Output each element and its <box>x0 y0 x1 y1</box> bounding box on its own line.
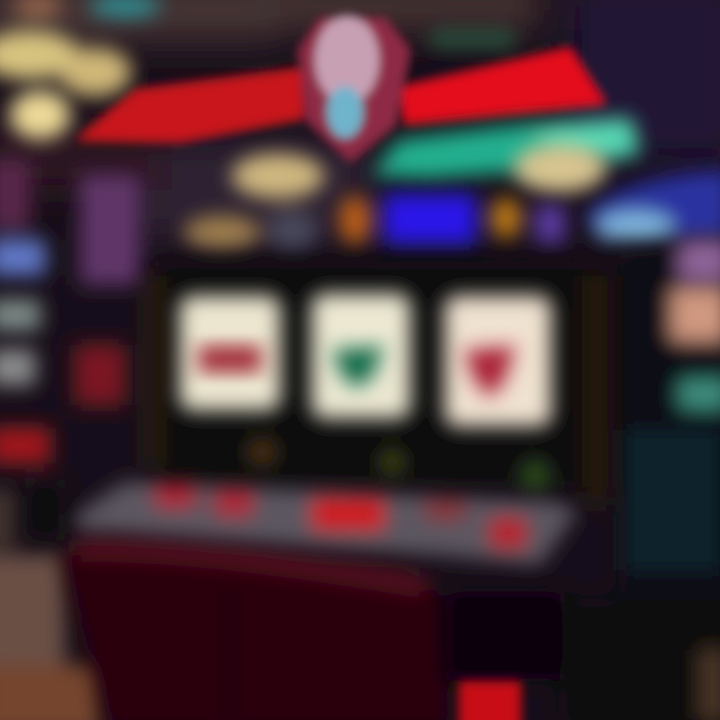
reel 3 symbol <box>464 346 516 398</box>
right blue dome <box>585 170 720 240</box>
slot machine cabinet <box>145 262 615 505</box>
left machines <box>0 160 140 540</box>
reel 2 symbol <box>332 346 384 388</box>
floor red patch <box>460 682 520 720</box>
red banner <box>76 48 606 142</box>
floor left <box>0 490 100 720</box>
reel 2 <box>312 294 410 418</box>
reel 1 symbol <box>198 345 262 373</box>
right side machines <box>560 240 720 720</box>
cream ornaments <box>184 144 606 250</box>
reel 3 <box>445 296 551 426</box>
ceiling and upper backdrop <box>0 0 720 240</box>
chair <box>62 539 450 720</box>
teal banner <box>372 32 640 178</box>
button console <box>76 482 578 565</box>
blue display and lights <box>340 194 565 244</box>
central sign <box>298 16 410 162</box>
chandelier left <box>0 0 161 139</box>
lower panel lights <box>246 438 551 491</box>
bottom dark area <box>445 590 565 680</box>
reel 1 <box>180 296 280 410</box>
